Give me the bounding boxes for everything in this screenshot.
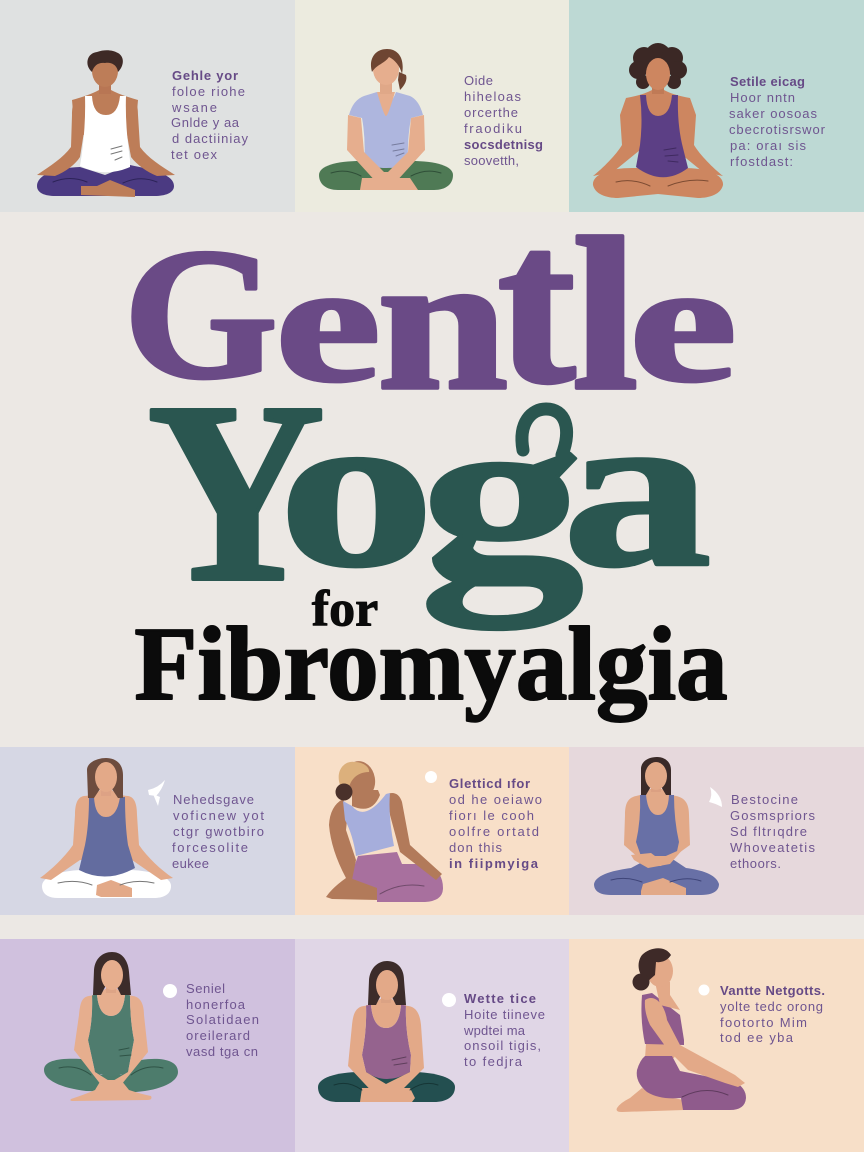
caption	[720, 983, 825, 1045]
caption: fraodiku	[464, 121, 522, 136]
panel: bottom left pose	[0, 939, 295, 1152]
figure: seated woman with hands on belly	[594, 757, 719, 895]
caption: ctgr gwotbiro	[173, 824, 264, 839]
figure: side-view kneeling woman	[617, 948, 746, 1112]
caption: Gosmspriors	[730, 808, 816, 823]
caption: Hoor nntn	[730, 90, 795, 105]
figure: seated woman in blue tank and white trousers	[40, 758, 173, 898]
panel: top middle pose	[295, 0, 569, 212]
caption	[463, 991, 545, 1069]
caption: Gehle yor	[172, 68, 238, 83]
caption: voficnew yot	[173, 808, 264, 823]
caption: oreilerard	[186, 1028, 250, 1043]
caption	[172, 792, 264, 871]
caption: od he oeiawo	[449, 792, 542, 807]
caption: eukee	[172, 856, 209, 871]
caption: vasd tga cn	[186, 1044, 258, 1059]
panel: bottom centre pose	[295, 939, 569, 1152]
panel: middle centre pose	[295, 747, 569, 915]
caption	[730, 792, 816, 871]
caption: tet oex	[171, 147, 218, 162]
caption: Bestocine	[731, 792, 798, 807]
icon: white dot	[442, 993, 456, 1007]
caption	[186, 981, 259, 1059]
caption: forcesolite	[172, 840, 248, 855]
title word: for: for	[312, 581, 378, 637]
caption: don this	[449, 840, 502, 855]
caption	[171, 68, 248, 162]
caption: pa: oraı sis	[730, 138, 806, 153]
caption: honerfoa	[186, 997, 246, 1012]
caption: Gnlde y aa	[171, 115, 240, 130]
arms and hands	[347, 115, 425, 184]
caption: fiorı le cooh	[449, 808, 534, 823]
title	[124, 179, 737, 722]
panel: bottom right pose	[569, 939, 864, 1152]
caption: wpdtei ma	[463, 1023, 526, 1038]
icon: white petal	[709, 787, 722, 807]
icon: white dot	[698, 984, 710, 996]
panel: middle left pose	[0, 747, 295, 915]
title word: Gentle: G	[124, 210, 278, 417]
title word: Gentle: t	[497, 179, 576, 431]
caption	[449, 776, 542, 871]
figure: seated woman in green tank, butterfly pose	[44, 952, 178, 1101]
caption: yolte tedc orong	[720, 999, 823, 1014]
figure: seated woman in white tank and purple trousers	[37, 50, 175, 197]
caption: oolfre ortatd	[449, 824, 539, 839]
caption: Whoveatetis	[730, 840, 816, 855]
title word: Yoga: o	[278, 364, 435, 613]
figure: woman in seated twist	[326, 759, 443, 902]
caption: Setile eicag	[730, 74, 805, 89]
icon: white sparkle	[148, 780, 165, 806]
title word: Yoga: g	[420, 364, 584, 633]
caption: soovetth,	[464, 153, 519, 168]
caption: rfostdast:	[730, 154, 793, 169]
caption	[729, 74, 826, 169]
caption: orcerthe	[464, 105, 518, 120]
caption: Gletticd ıfor	[449, 776, 530, 791]
title word: Gentle: l	[572, 194, 638, 436]
title word: Yoga	[147, 349, 711, 635]
shoulders and arms	[348, 999, 424, 1098]
panel: middle right pose	[569, 747, 864, 915]
caption: Wette tice	[464, 991, 536, 1006]
icon: white dot	[425, 771, 437, 783]
caption: Solatidaen	[186, 1012, 259, 1027]
title word: Gentle	[124, 179, 737, 436]
caption: Vantte Netgotts.	[720, 983, 825, 998]
figure: seated woman in mauve tank and dark teal trousers	[318, 961, 455, 1102]
caption: in fiipmyiga	[449, 856, 539, 871]
caption: cbecrotisrswor	[729, 122, 826, 137]
caption: to fedjra	[464, 1054, 523, 1069]
figure: seated woman in lilac t-shirt and green trousers	[319, 49, 453, 190]
caption: ethoors.	[730, 856, 781, 871]
shoulders and arms	[74, 989, 148, 1090]
caption: Oide	[464, 73, 493, 88]
caption: socsdetnisg	[464, 137, 543, 152]
caption	[464, 73, 543, 168]
caption: wsane	[171, 100, 217, 115]
caption: onsoil tigis,	[464, 1038, 541, 1053]
title word: Fibromyalgia: Fibromyalgia	[134, 606, 728, 722]
panel: top left pose	[0, 0, 295, 212]
caption: hiheloas	[464, 89, 522, 104]
caption: d dactiiniay	[172, 131, 248, 146]
title word: Gentle: n	[377, 214, 508, 430]
caption: saker oosoas	[729, 106, 818, 121]
caption: Sd fltrıqdre	[730, 824, 807, 839]
caption: foloe riohe	[172, 84, 245, 99]
title word: Yoga: a	[562, 365, 711, 614]
figure: seated woman with curly hair in purple tank	[593, 43, 723, 198]
caption: Hoite tiineve	[464, 1007, 545, 1022]
title word: Gentle: e	[275, 228, 381, 417]
caption: Nehedsgave	[173, 792, 254, 807]
caption: Seniel	[186, 981, 225, 996]
title word: Yoga: Y	[147, 349, 325, 635]
icon: white dot	[163, 984, 177, 998]
panel: top right pose	[569, 0, 864, 212]
caption: tod ee yba	[720, 1030, 794, 1045]
caption: footorto Mim	[720, 1015, 807, 1030]
title word: Gentle: e	[629, 228, 737, 418]
